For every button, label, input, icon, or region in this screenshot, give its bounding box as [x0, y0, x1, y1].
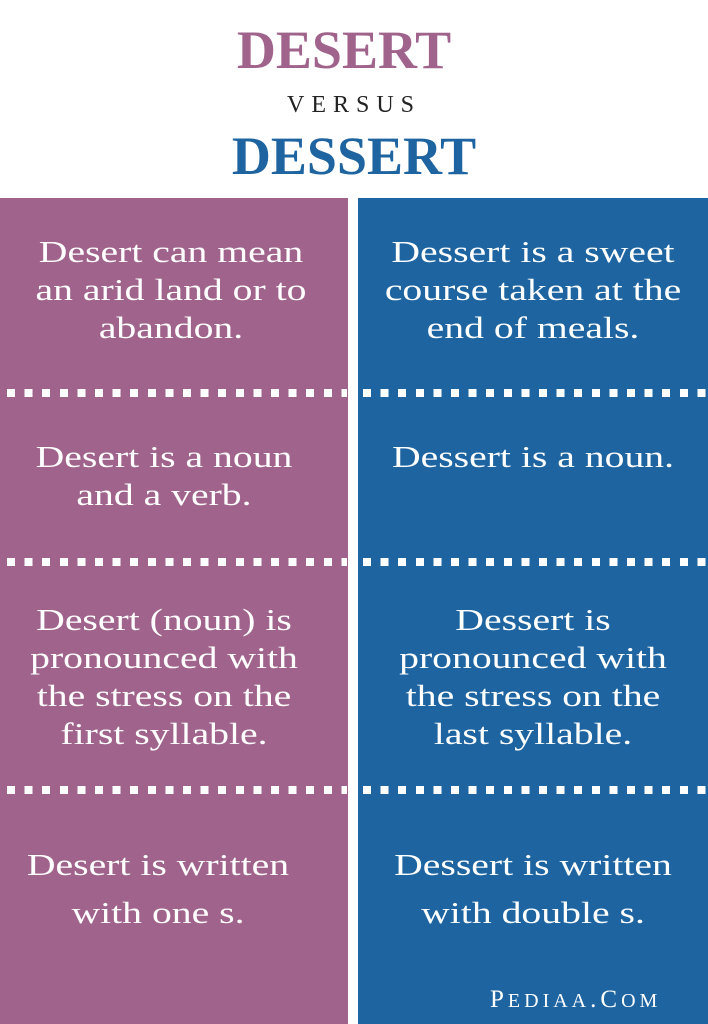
text: desert meaning: [35, 234, 307, 345]
text: desert meaning: Desert can mean: [39, 234, 303, 269]
text: desert part of speech: [36, 439, 292, 512]
text: dessert pronunciation: pronounced with: [399, 640, 667, 675]
text: desert meaning: an arid land or to: [35, 272, 307, 307]
text: desert pronunciation: Desert (noun) is: [36, 602, 292, 637]
text: desert spelling: Desert is written: [27, 847, 289, 882]
text: dessert spelling: Dessert is written: [394, 847, 672, 882]
footer: pediaa.com: PEDIAA.COM: [490, 986, 661, 1013]
text: dessert meaning: [385, 234, 681, 345]
text: dessert pronunciation: [399, 602, 667, 751]
text: dessert pronunciation: last syllable.: [434, 716, 632, 751]
panel: desert column: [0, 198, 348, 1024]
text: desert pronunciation: [30, 602, 298, 751]
title: desert: DESERT: [237, 20, 451, 80]
text: desert part of speech: Desert is a noun: [36, 439, 292, 474]
text: dessert meaning: course taken at the: [385, 272, 681, 307]
text: desert part of speech: and a verb.: [76, 477, 252, 512]
panel: dessert column: [358, 198, 708, 1024]
title: dessert: DESSERT: [232, 126, 476, 186]
text: dessert spelling: with double s.: [421, 895, 645, 930]
text: dessert meaning: Dessert is a sweet: [391, 234, 675, 269]
text: dessert meaning: end of meals.: [427, 310, 639, 345]
text: desert spelling: [27, 847, 289, 930]
text: dessert pronunciation: the stress on the: [406, 678, 660, 713]
text: dessert part of speech: Dessert is a noun.: [392, 439, 674, 474]
text: desert meaning: abandon.: [99, 310, 243, 345]
text: dessert pronunciation: Dessert is: [455, 602, 611, 637]
subtitle: versus: VERSUS: [287, 92, 421, 118]
text: desert pronunciation: the stress on the: [37, 678, 291, 713]
text: desert pronunciation: pronounced with: [30, 640, 298, 675]
text: desert pronunciation: first syllable.: [60, 716, 268, 751]
text: dessert spelling: [394, 847, 672, 930]
text: desert spelling: with one s.: [71, 895, 245, 930]
